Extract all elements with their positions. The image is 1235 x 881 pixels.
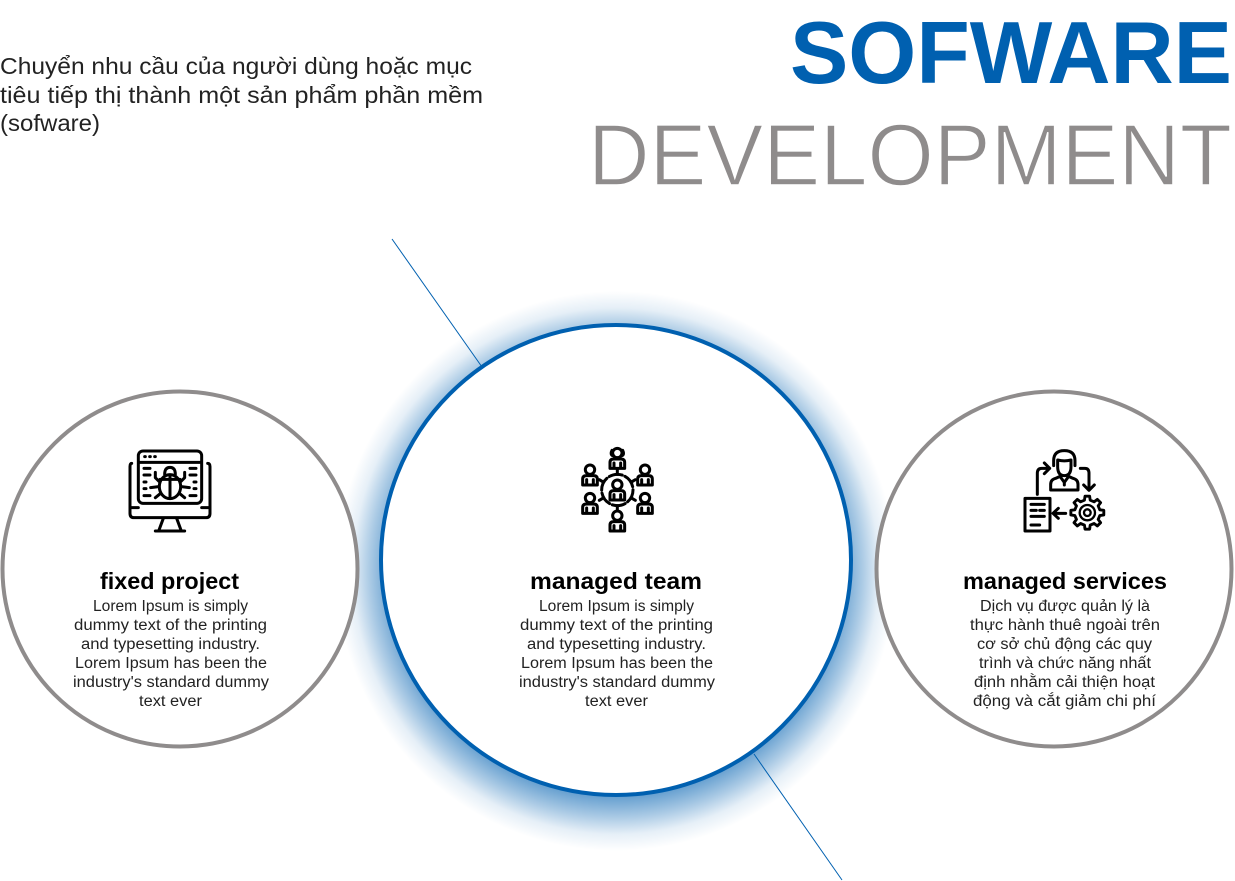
- intro text: tiêu tiếp thị thành một sản phẩm phần mềm: [0, 82, 483, 108]
- heading: managed services: managed services: [963, 568, 1167, 594]
- icon: team network: [583, 448, 652, 531]
- body: managed services: trình và chức năng nhất: [979, 655, 1152, 672]
- body: managed services: [970, 598, 1160, 710]
- circle: fixed project: [2, 392, 358, 746]
- diagonal line top: [392, 239, 482, 367]
- intro text: [0, 53, 483, 136]
- heading: fixed project: fixed project: [100, 568, 239, 594]
- panel: managed team: [381, 325, 851, 795]
- body: fixed project: industry's standard dummy: [73, 674, 269, 691]
- body: managed team: and typesetting industry.: [527, 636, 706, 653]
- body: managed services: động và cắt giảm chi phí: [973, 693, 1157, 710]
- body: fixed project: and typesetting industry.: [81, 636, 260, 653]
- body: managed services: thực hành thuê ngoài trên: [970, 617, 1160, 634]
- panel: fixed project: [2, 392, 358, 746]
- center circle glow: [336, 291, 896, 851]
- panel: managed services: [876, 392, 1232, 746]
- body: managed team: industry's standard dummy: [519, 674, 715, 691]
- body: fixed project: [73, 598, 269, 710]
- body: fixed project: text ever: [139, 693, 202, 710]
- title: DEVELOPMENT: DEVELOPMENT: [588, 107, 1232, 204]
- title: SOFWARE: SOFWARE: [790, 3, 1232, 102]
- body: managed services: định nhằm cải thiện hoạt: [974, 674, 1156, 691]
- body: managed team: Lorem Ipsum has been the: [521, 655, 713, 672]
- body: fixed project: Lorem Ipsum has been the: [75, 655, 267, 672]
- body: managed team: [519, 598, 715, 710]
- body: managed services: Dịch vụ được quản lý là: [980, 598, 1150, 615]
- body: managed team: text ever: [585, 693, 648, 710]
- intro text: Chuyển nhu cầu của người dùng hoặc mục: [0, 53, 472, 79]
- icon: support agent, document and gear: [1025, 451, 1104, 531]
- body: fixed project: dummy text of the printing: [74, 617, 267, 634]
- body: managed team: Lorem Ipsum is simply: [539, 598, 694, 615]
- circle: managed services: [876, 392, 1232, 746]
- heading: managed team: managed team: [530, 568, 702, 594]
- diagonal line bottom: [754, 754, 842, 880]
- circle: managed team: [381, 325, 851, 795]
- intro text: (sofware): [0, 110, 100, 136]
- body: managed team: dummy text of the printing: [520, 617, 713, 634]
- body: managed services: cơ sở chủ động các quy: [977, 636, 1152, 653]
- body: fixed project: Lorem Ipsum is simply: [93, 598, 248, 615]
- icon: monitor with bug: [130, 451, 210, 531]
